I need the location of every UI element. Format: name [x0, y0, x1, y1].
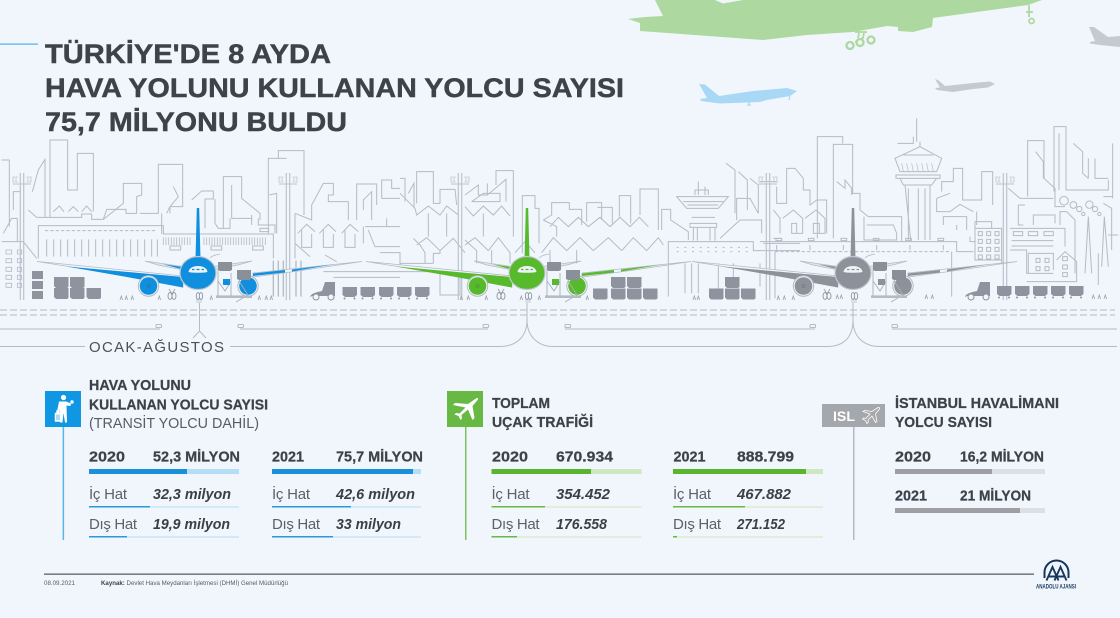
2021 traffic figures: 467.882 — [736, 486, 792, 503]
baggage containers — [32, 271, 756, 300]
title: 75,7 MİLYONU BULDU — [45, 107, 347, 137]
2021 passenger figures: 75,7 MİLYON — [336, 448, 423, 466]
heading: İSTANBUL HAVALİMANI — [895, 395, 1059, 412]
green airliner front view — [366, 208, 691, 302]
heading: KULLANAN YOLCU SAYISI — [89, 396, 268, 414]
2021 traffic figures: 2021 — [674, 448, 706, 466]
icon: white plane — [447, 391, 483, 427]
terminal building — [38, 213, 273, 258]
control tower 3 — [895, 118, 942, 240]
tiny ground crew marks — [120, 295, 1107, 300]
2021 traffic figures — [673, 448, 823, 538]
2021 passenger figures: 2021 — [272, 448, 304, 466]
control tower — [677, 182, 728, 241]
panel: passengers — [45, 377, 423, 540]
title: TÜRKİYE'DE 8 AYDA — [45, 39, 331, 69]
2021 traffic figures: 888.799 — [737, 448, 794, 466]
2020 passenger figures: 52,3 MİLYON — [153, 448, 240, 466]
icon: ISL sign with plane — [822, 404, 885, 427]
heading: (TRANSİT YOLCU DAHİL) — [89, 414, 259, 432]
left section skyline — [2, 140, 400, 297]
2020 traffic figures: 176.558 — [556, 516, 608, 533]
2020 traffic figures: Dış Hat — [492, 516, 540, 533]
logo: Anadolu Agency: ANADOLU AJANSI — [1036, 584, 1076, 590]
heading — [89, 377, 268, 432]
2021 airport figures: 21 MİLYON — [960, 488, 1031, 504]
panel: Istanbul Airport — [822, 395, 1059, 540]
2020 traffic figures: 354.452 — [556, 486, 611, 503]
heading: HAVA YOLUNU — [89, 377, 191, 394]
heading — [492, 395, 593, 431]
ship-like terminal — [323, 218, 400, 277]
gray airliner front view — [692, 208, 1017, 302]
icon: ISL sign with plane: ISL — [833, 409, 855, 424]
heading: UÇAK TRAFİĞİ — [492, 413, 593, 431]
2020 traffic figures: İç Hat — [492, 485, 530, 503]
2021 passenger figures: 42,6 milyon — [335, 486, 415, 503]
building with windows — [970, 222, 1002, 263]
title — [45, 39, 624, 137]
2021 airport figures — [895, 488, 1045, 513]
2021 airport figures: 2021 — [895, 488, 927, 504]
2020 passenger figures — [89, 448, 240, 538]
center section skyline — [400, 163, 800, 297]
title: HAVA YOLUNU KULLANAN YOLCU SAYISI — [45, 73, 624, 103]
logo: Anadolu Agency — [1036, 560, 1076, 590]
blue plane silhouette — [699, 84, 797, 105]
2021 traffic figures: İç Hat — [673, 485, 712, 503]
runway markings — [0, 310, 1117, 329]
heading: YOLCU SAYISI — [895, 414, 992, 431]
2020 airport figures: 2020 — [895, 448, 931, 466]
2021 passenger figures: İç Hat — [272, 485, 311, 503]
front terminal — [760, 242, 973, 298]
2021 passenger figures — [272, 448, 423, 538]
2020 traffic figures: 2020 — [492, 448, 528, 466]
timeline connectors — [0, 303, 1117, 346]
panel: aircraft traffic — [447, 391, 823, 540]
airport cityscape line art — [2, 118, 1118, 300]
2020 airport figures — [895, 448, 1045, 474]
footer rule — [44, 574, 1034, 575]
2021 passenger figures: Dış Hat — [272, 516, 321, 533]
title accent line — [0, 44, 38, 45]
small gray plane silhouette — [935, 79, 995, 92]
2020 passenger figures: 19,9 milyon — [153, 516, 230, 533]
2020 passenger figures: 2020 — [89, 448, 125, 466]
2020 traffic figures: 670.934 — [556, 448, 614, 466]
large green plane silhouette — [628, 0, 1042, 49]
icon: traveller with luggage — [45, 391, 81, 427]
antenna poles — [13, 173, 1014, 300]
2021 traffic figures: 271.152 — [736, 516, 786, 533]
source: Kaynak: Devlet Hava Meydanları İşletmesi (DHMİ) Genel Müdürlüğü — [101, 578, 288, 587]
2021 traffic figures: Dış Hat — [673, 516, 722, 533]
heading — [895, 395, 1059, 431]
2020 passenger figures: Dış Hat — [89, 516, 138, 533]
tug vehicles and carts — [310, 282, 1084, 300]
2021 passenger figures: 33 milyon — [336, 516, 401, 533]
2020 passenger figures: İç Hat — [89, 485, 128, 503]
2020 passenger figures: 32,3 milyon — [153, 486, 231, 503]
right gray plane silhouette — [1089, 27, 1120, 47]
date: 08.09.2021 — [44, 580, 75, 587]
2020 traffic figures — [492, 448, 642, 538]
period label: OCAK-AĞUSTOS — [89, 339, 224, 356]
heading: TOPLAM — [492, 395, 550, 412]
blue airliner front view — [37, 208, 362, 302]
left windows — [6, 250, 22, 287]
terminal 2 — [668, 238, 800, 297]
2020 airport figures: 16,2 MİLYON — [960, 448, 1044, 466]
right section skyline — [760, 118, 1118, 298]
